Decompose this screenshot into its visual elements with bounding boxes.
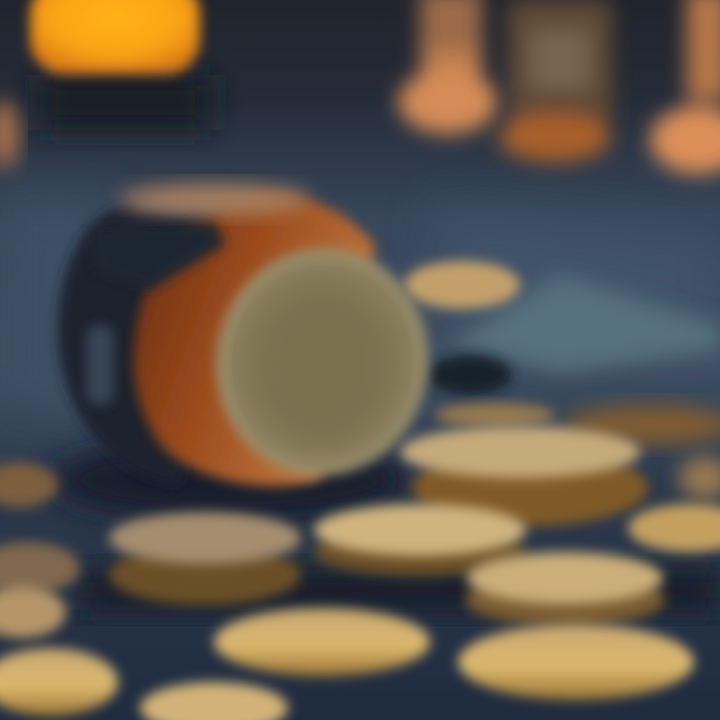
coin far right xyxy=(679,456,720,500)
coin bottom xyxy=(140,682,288,720)
barrel xyxy=(50,184,443,520)
coin mid left xyxy=(109,545,301,605)
coin rolling behind barrel xyxy=(404,261,520,309)
back coins xyxy=(435,403,555,427)
barrel shadow xyxy=(50,440,410,520)
barrel body xyxy=(134,194,375,486)
shadow under barrel xyxy=(428,355,512,395)
pile shadow xyxy=(80,570,720,610)
barrel strap highlight xyxy=(86,325,114,405)
left edge orange object xyxy=(0,100,19,168)
coin front center xyxy=(214,608,430,676)
figure: right leg xyxy=(650,0,720,174)
barrel top highlight xyxy=(120,184,310,216)
figure: left leg xyxy=(398,0,498,134)
coin pile xyxy=(0,403,720,720)
background figures xyxy=(398,0,720,174)
paper sheet on table xyxy=(450,275,720,372)
barrel dark strap xyxy=(58,205,240,485)
table highlight xyxy=(0,200,720,420)
coin front left xyxy=(0,648,118,716)
coin stack center right xyxy=(412,450,648,526)
figure: center jar xyxy=(499,0,612,162)
coin left stack xyxy=(0,542,80,594)
coin left top xyxy=(0,463,58,507)
coin front right xyxy=(458,624,694,700)
glowing lamp xyxy=(30,0,210,130)
coin right middle xyxy=(465,574,665,626)
coin center xyxy=(314,528,526,576)
coin inner shade xyxy=(256,289,388,441)
barrel dark top band xyxy=(90,222,225,290)
barrel coin face xyxy=(201,234,443,490)
